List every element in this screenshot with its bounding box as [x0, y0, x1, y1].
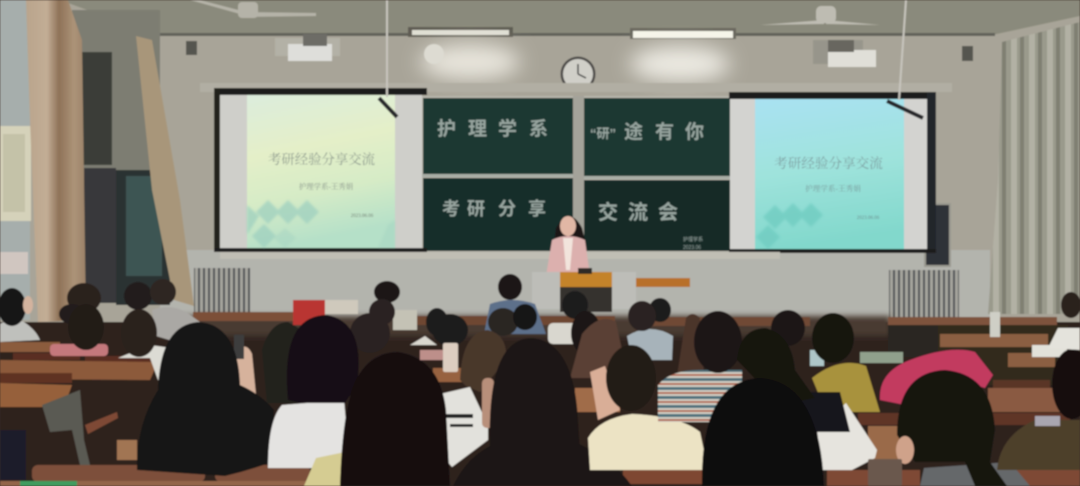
students centre-right row — [443, 291, 805, 392]
chalk heading left top: 学 — [498, 117, 517, 140]
projector remote poles — [379, 0, 923, 118]
presenter — [546, 216, 590, 276]
student: jersey — [737, 328, 877, 470]
centre and right desks — [420, 350, 1080, 486]
chalk signature — [683, 236, 703, 251]
backpack: pink — [880, 350, 993, 405]
wall clock — [560, 56, 596, 92]
round wall fixture and cameras — [186, 41, 973, 64]
student: far right white — [1048, 292, 1080, 350]
chalk heading left bottom — [442, 198, 546, 219]
chalk heading left bottom: 分 — [498, 199, 516, 219]
chalk heading left top: 系 — [529, 118, 548, 140]
slide subtitle: 护理学系-王秀娟 — [805, 183, 861, 193]
chalk heading right bottom — [598, 200, 678, 224]
left front students — [0, 288, 40, 342]
slide diamonds — [247, 200, 395, 248]
chalk heading right bottom: 会 — [658, 201, 678, 224]
floor and room lower area — [0, 316, 1080, 486]
student: cream top — [588, 345, 708, 470]
slide date: 2023.06.06 — [351, 214, 374, 219]
left wall and door — [0, 0, 170, 320]
student: yellow hoodie — [810, 313, 880, 412]
student: long hair centre — [453, 338, 632, 486]
slide subtitle: 护理学系-王秀娟 — [299, 182, 354, 191]
slide title: 考研经验分享交流 — [268, 151, 375, 167]
wall calendar poster — [0, 126, 31, 274]
chalk heading left bottom: 考 — [442, 199, 460, 219]
chalk heading right top — [590, 120, 704, 143]
chalk heading left top: 理 — [468, 119, 487, 140]
student: black long hair left — [137, 322, 274, 476]
student: white hoodie — [268, 315, 359, 468]
chalk heading left bottom: 享 — [528, 198, 546, 219]
student: right front — [868, 370, 1030, 486]
right projection screen — [729, 92, 936, 253]
upper wall light glow — [420, 44, 730, 82]
chalk heading right top: 有 — [655, 121, 674, 143]
blackboard — [422, 96, 732, 252]
slide date: 2023.06.06 — [857, 216, 880, 221]
chalk heading left top: 护 — [437, 118, 456, 140]
chalk heading right bottom: 交 — [598, 200, 618, 224]
dark panel right of screen — [925, 204, 950, 266]
students centre-left row — [262, 274, 546, 403]
chalk signature: 护理学系 — [683, 236, 703, 243]
chalk heading right top: 途 — [624, 120, 643, 143]
ceiling fan left — [190, 0, 316, 18]
ceiling fan right — [760, 6, 880, 25]
chalk signature: 2023.06 — [683, 245, 701, 251]
ceiling lights — [408, 27, 736, 39]
student: white top stripes — [440, 387, 488, 467]
chalk tray — [220, 252, 780, 259]
left curtain — [26, 0, 194, 322]
projectors — [275, 34, 876, 67]
right curtain — [988, 22, 1080, 314]
red box and sign — [293, 300, 358, 325]
left projection screen — [214, 88, 427, 252]
chalk heading left top — [437, 117, 548, 140]
ceiling — [60, 0, 1080, 36]
audience back rows — [0, 274, 805, 403]
radiators — [194, 268, 959, 317]
chalk heading right top: 你 — [685, 121, 704, 143]
student: brown jacket — [997, 349, 1080, 470]
slide title: 考研经验分享交流 — [774, 155, 883, 171]
lectern — [532, 268, 690, 312]
student: front dark hair — [702, 378, 824, 486]
chalk heading right bottom: 流 — [628, 201, 648, 224]
student: long hair front centre — [304, 352, 450, 486]
left desks — [0, 342, 340, 486]
student: striped shirt — [658, 311, 742, 422]
blackboard top rail — [200, 83, 952, 92]
chalk heading left bottom: 研 — [467, 199, 485, 219]
students row left — [50, 279, 200, 380]
slide diamonds — [756, 203, 823, 249]
back rows of desks — [193, 312, 1068, 385]
chalk heading right top: “研” — [590, 126, 616, 141]
